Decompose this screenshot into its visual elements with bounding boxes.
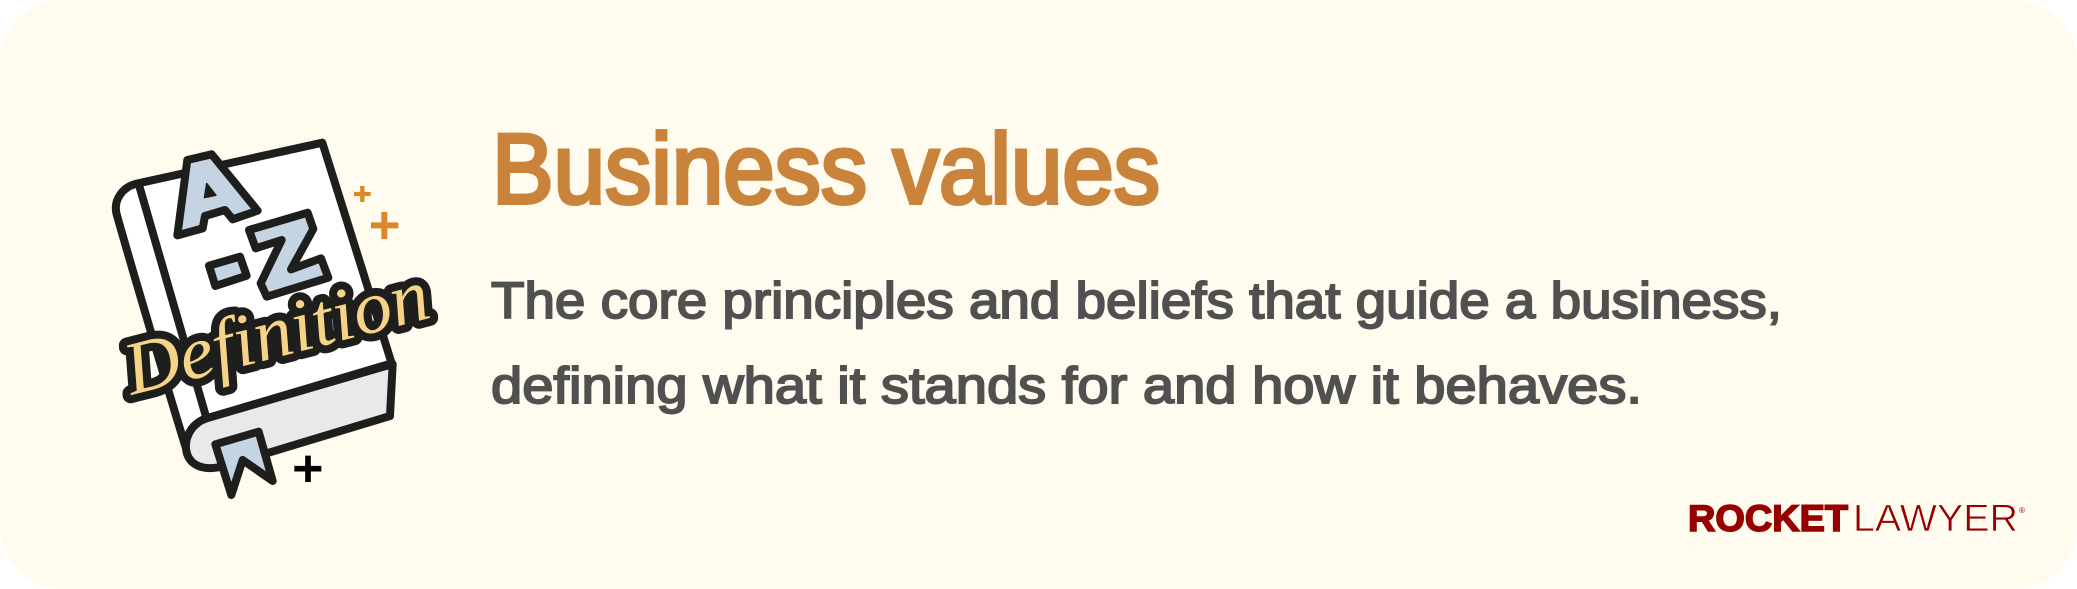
logo word: ROCKET: ROCKET [1688, 498, 1848, 539]
orange plus large [371, 212, 398, 239]
letter A [177, 154, 258, 235]
logo: Rocket Lawyer [1688, 498, 2025, 540]
logo word: LAWYER: LAWYER [1853, 498, 2018, 540]
book pages [186, 364, 393, 468]
definition text [491, 272, 1782, 414]
letter Z [249, 213, 328, 297]
hyphen [209, 257, 247, 286]
book cover [116, 143, 392, 448]
letter A counter [204, 183, 216, 198]
registered mark: ® [2019, 506, 2025, 515]
orange plus small [354, 186, 371, 202]
word: Definition: Definition [114, 253, 438, 412]
icon: definition book [114, 143, 438, 495]
title: Business values [492, 113, 1160, 224]
book spine line [139, 185, 206, 417]
black plus [294, 456, 321, 482]
line 2: defining what it stands for and how it behaves. [491, 357, 1642, 414]
line 1: The core principles and beliefs that guide a business, [491, 272, 1782, 329]
bookmark [215, 432, 273, 495]
